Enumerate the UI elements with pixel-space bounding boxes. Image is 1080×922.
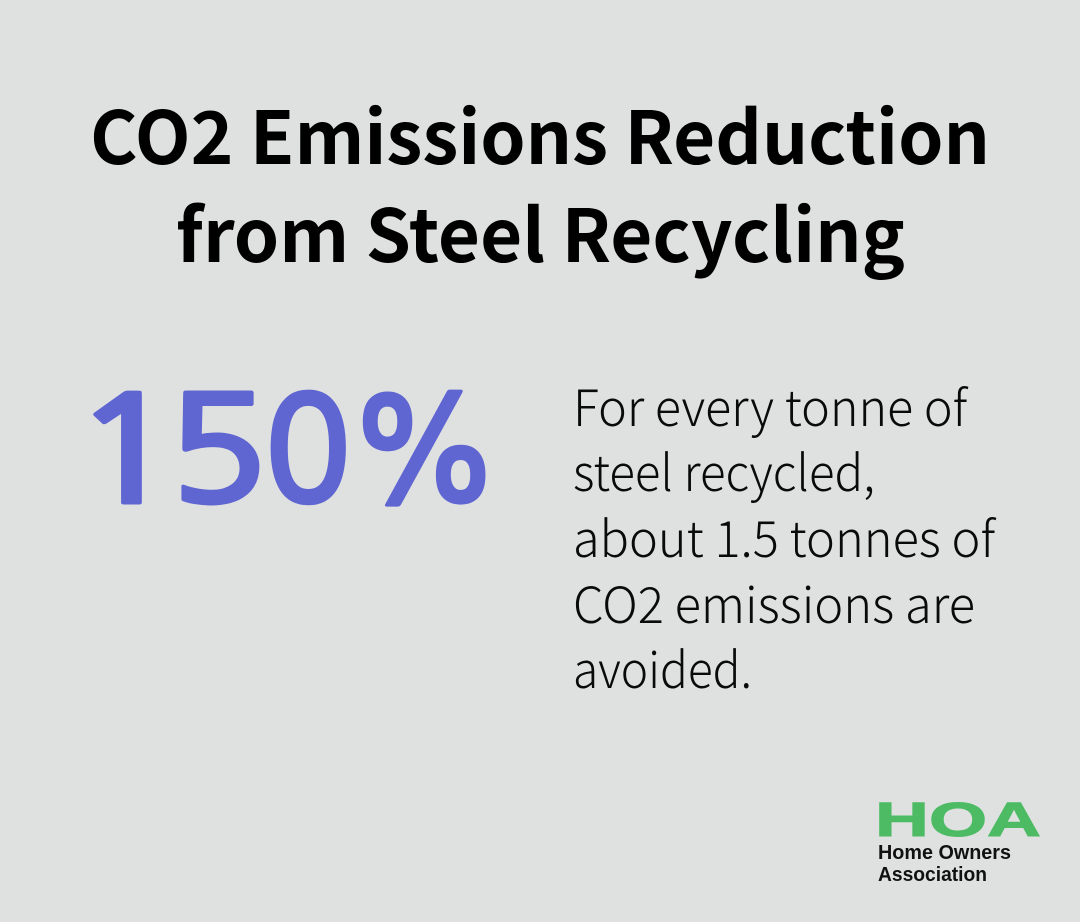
logo: HOA Home Owners Association: HOA <box>875 794 1041 847</box>
description text <box>573 369 997 703</box>
big statistic: 5 <box>164 379 271 527</box>
title: from Steel Recycling <box>176 178 905 284</box>
big statistic <box>68 378 502 527</box>
description text: about 1.5 tonnes of <box>573 500 997 572</box>
big statistic: 0 <box>262 378 353 526</box>
description text: steel recycled, <box>573 434 875 506</box>
big statistic: % <box>347 382 502 526</box>
description text: avoided. <box>573 631 752 703</box>
description text: For every tonne of <box>573 369 969 441</box>
title: CO2 Emissions Reduction <box>90 80 990 186</box>
big statistic: 1 <box>68 379 186 527</box>
description text: CO2 emissions are <box>573 566 975 638</box>
title <box>90 80 990 284</box>
logo: HOA Home Owners Association <box>875 794 1041 886</box>
logo: HOA Home Owners Association: Home Owners <box>878 842 1011 864</box>
logo: HOA Home Owners Association: Association <box>878 864 987 886</box>
